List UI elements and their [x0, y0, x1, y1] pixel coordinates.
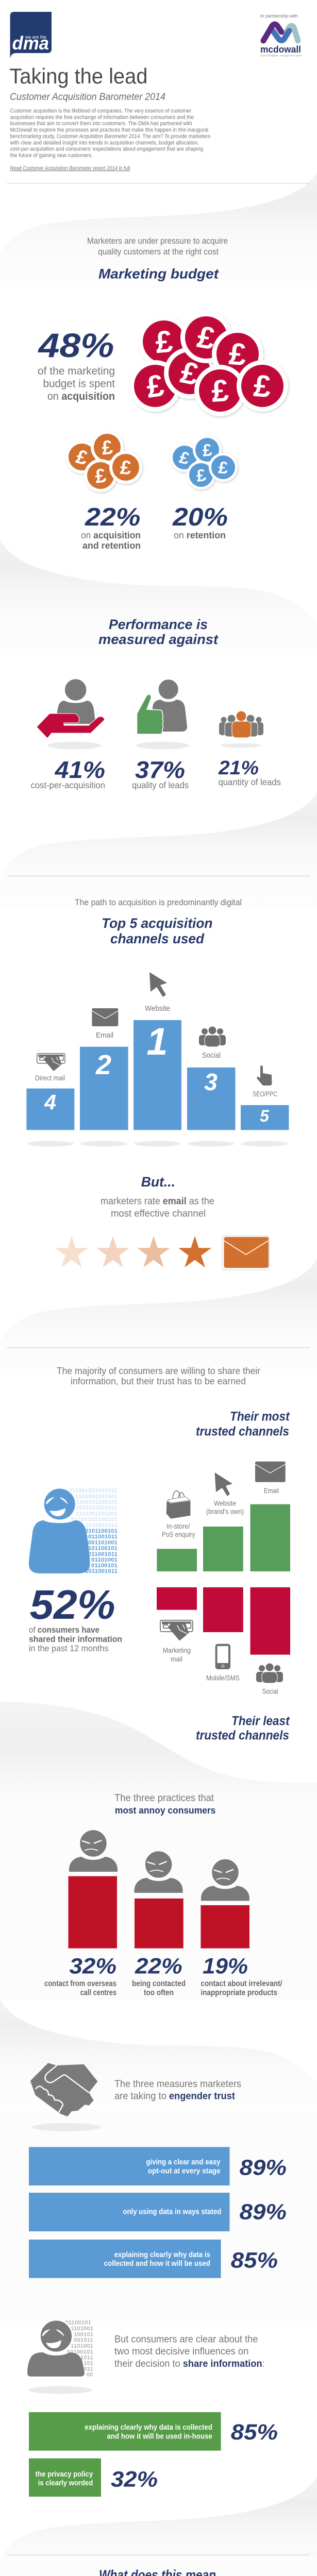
- bar: clear opt-out 89 percent: [29, 2147, 287, 2185]
- stat: 21 percent: 21%: [218, 757, 259, 779]
- stat: 20 percent: [172, 503, 228, 540]
- icon: orange pound coins: £: [74, 446, 90, 469]
- section intro: marketers under pressure: quality customers at the right cost: [98, 247, 219, 257]
- stat: 52 percent: in the past 12 months: [29, 1643, 109, 1653]
- binary data behind happy person: 1001011001011: [76, 1505, 118, 1511]
- heading: practices that annoy: [114, 1793, 215, 1816]
- icon: person thumbs up: [136, 679, 189, 749]
- label: website: Website: [214, 1500, 236, 1507]
- bar: explaining data 85 percent: [29, 2240, 278, 2278]
- stat: 48 percent: [37, 326, 115, 402]
- heading: most trusted channels: [196, 1410, 290, 1439]
- heading: most trusted channels: trusted channels: [196, 1425, 289, 1439]
- bar 3: 3: [204, 1069, 218, 1095]
- stat: 48 percent: budget is spent: [43, 378, 115, 390]
- heading: marketing budget: Marketing budget: [98, 266, 219, 282]
- stat: 20 percent: on retention: [174, 530, 226, 540]
- icon: group of people: [219, 711, 263, 748]
- bar: clear opt-out 89 percent: giving a clear and easy: [146, 2158, 221, 2166]
- heading: performance: measured against: [98, 632, 219, 647]
- label: email: Email: [264, 1487, 279, 1495]
- bar 2: [80, 1047, 128, 1130]
- icon: red pound coins: £: [144, 368, 166, 404]
- icon: red pound coins: £: [195, 319, 218, 356]
- bar: privacy policy 32 percent: is clearly worded: [38, 2479, 93, 2487]
- section intro: consumers willing to share: The majority of consumers are willing to share their: [57, 1366, 260, 1376]
- text block: email most effective: most effective channel: [111, 1209, 206, 1219]
- label: mobile sms: Mobile/SMS: [206, 1674, 240, 1682]
- label: in-store: [162, 1522, 195, 1538]
- icon: direct mail slot: [37, 1054, 65, 1071]
- binary data behind grey person: 01100101: [67, 2349, 93, 2355]
- text block: introduction: acquisition requires the free exchange of information between consumers and the: [10, 114, 194, 121]
- chart: annoyed consumers 19 percent: inappropriate products: [201, 1988, 277, 1997]
- bar: explaining data 85 percent: 85%: [231, 2248, 278, 2273]
- subtitle: Customer Acquisition Barometer 2014: [10, 92, 165, 103]
- label: website: [206, 1500, 244, 1516]
- text block: email most effective: marketers rate email as the: [101, 1196, 214, 1207]
- bar: privacy policy 32 percent: [29, 2459, 158, 2497]
- chart: annoyed consumers 19 percent: contact about irrelevant/: [201, 1979, 282, 1988]
- icon: red pound coins: £: [178, 354, 202, 392]
- heading: practices that annoy: most annoy consumers: [115, 1805, 215, 1816]
- bar: data in ways stated 89 percent: [29, 2193, 287, 2231]
- binary data behind happy person: 011001011: [88, 1534, 118, 1540]
- binary data behind happy person: 1100101100101: [76, 1499, 118, 1505]
- bar 4: 4: [44, 1090, 56, 1114]
- binary data behind grey person: 100101: [74, 2331, 93, 2337]
- binary data behind happy person: 01101001: [91, 1557, 118, 1563]
- text block: consumers decisive influences: [114, 2334, 265, 2369]
- bar: clear opt-out 89 percent: opt-out at every stage: [148, 2167, 221, 2175]
- bar 5: [241, 1105, 289, 1130]
- icon: orange pound coins: £: [120, 457, 132, 479]
- chart: annoyed consumers 19 percent: [201, 1859, 282, 1997]
- text block: consumers decisive influences: two most decisive influences on: [114, 2346, 248, 2357]
- icon: red pound coins: £: [211, 373, 229, 409]
- logo: mcdowall partner: mcdowall: [260, 44, 301, 55]
- text block: introduction: businesses that aim to convert them into customers. The DMA has partnered with: [10, 121, 192, 127]
- icon: envelope: [255, 1462, 286, 1482]
- icon: shopping bag: [166, 1491, 190, 1519]
- chart: annoyed consumers 32 percent: 32%: [69, 1954, 116, 1979]
- bar: explaining data in-house 85 percent: [29, 2412, 278, 2451]
- text block: introduction: benchmarking study, Customer Acquisition Barometer 2014. The aim? To provide marketers: [10, 133, 211, 140]
- icon: red pound coins: £: [227, 336, 248, 372]
- bar: data in ways stated 89 percent: only using data in ways stated: [123, 2208, 221, 2216]
- icon: cursor: [149, 972, 167, 997]
- bar 4: [26, 1089, 74, 1130]
- icon: blue pound coins: [170, 435, 238, 489]
- chart: annoyed consumers 22 percent: too often: [144, 1988, 174, 1997]
- label: website: (brand’s own): [206, 1508, 244, 1516]
- stat: 41 percent: 41%: [55, 756, 105, 783]
- stat: 48 percent: on acquisition: [47, 391, 115, 402]
- chart: most trusted channels: [157, 1462, 290, 1571]
- label: marketing mail: mail: [171, 1655, 182, 1663]
- icon: blue pound coins: £: [218, 457, 229, 478]
- text block: introduction: cost-per-acquisition and consumers’ expectations about engagement that are shaping: [10, 146, 203, 152]
- section intro: marketers under pressure: [87, 236, 228, 257]
- binary data behind grey person: 001011: [74, 2337, 93, 2344]
- label: in-store: In-store/: [166, 1522, 190, 1530]
- chart: annoyed consumers 22 percent: 22%: [135, 1954, 182, 1979]
- text block: introduction: McDowall to explore the processes and practices that make this happen in this inaugural: [10, 127, 208, 133]
- bar: explaining data in-house 85 percent: explaining clearly why data is collected: [85, 2424, 212, 2432]
- icon: mobile phone: [215, 1644, 230, 1669]
- label: direct mail: Direct mail: [35, 1074, 65, 1082]
- stat: 20 percent: 20%: [172, 503, 228, 531]
- section intro: consumers willing to share: [57, 1366, 260, 1386]
- bar: privacy policy 32 percent: the privacy policy: [36, 2470, 93, 2479]
- stat: 48 percent: 48%: [37, 326, 114, 364]
- text block: measures marketers are taking: are taking to engender trust: [114, 2091, 235, 2102]
- logo: dma: dma: [12, 32, 49, 54]
- bar 3: [187, 1067, 235, 1130]
- icon: red pound coins: [129, 312, 288, 416]
- binary data behind grey person: 1101001: [71, 2326, 93, 2332]
- heading: but: But...: [141, 1174, 175, 1190]
- heading: top 5 channels: Top 5 acquisition: [102, 916, 212, 931]
- binary data behind happy person: 011001011: [88, 1551, 118, 1557]
- stat: 22 percent: [81, 503, 141, 551]
- binary data behind happy person: 011001011001011: [69, 1488, 118, 1494]
- binary data behind happy person: 101100101: [88, 1546, 118, 1552]
- icon: orange pound coins: £: [101, 437, 113, 459]
- icon: envelope: [92, 1008, 118, 1026]
- icon: handshake: [30, 2063, 101, 2131]
- label: social: Social: [202, 1052, 221, 1060]
- text block: introduction: Customer acquisition is the lifeblood of companies. The very essence of customer: [10, 108, 191, 114]
- icon: red pound coins: £: [252, 368, 273, 404]
- heading: most trusted channels: Their most: [230, 1410, 290, 1424]
- heading: performance: [98, 617, 219, 647]
- binary data behind happy person: 1101001101001: [76, 1511, 118, 1517]
- text block: email most effective: [101, 1196, 214, 1219]
- stat: 21 percent: [218, 757, 281, 787]
- bar 5: 5: [260, 1107, 270, 1125]
- chart: annoyed consumers 32 percent: call centres: [80, 1988, 116, 1997]
- text block: consumers decisive influences: But consumers are clear about the: [114, 2334, 258, 2345]
- heading: least trusted channels: trusted channels: [196, 1728, 289, 1743]
- text block: measures marketers are taking: [114, 2078, 241, 2102]
- logo: mcdowall partner: In partnership with: [260, 13, 298, 19]
- star rating with envelope: [55, 1236, 269, 1270]
- stat: 22 percent: 22%: [85, 503, 140, 531]
- bar 1: 1: [146, 1020, 168, 1063]
- icon: pointing hand: [257, 1065, 272, 1086]
- stat: 41 percent: [31, 756, 105, 790]
- icon: orange pound coins: [65, 431, 142, 492]
- logo: dma: [10, 12, 52, 58]
- stat: 37 percent: [132, 756, 189, 790]
- label: website: Website: [145, 1005, 170, 1013]
- stat: 37 percent: quality of leads: [132, 780, 189, 790]
- stat: 37 percent: 37%: [135, 756, 185, 783]
- stat: 41 percent: cost-per-acquisition: [31, 780, 105, 790]
- icon: social people: [199, 1026, 226, 1047]
- heading: least trusted channels: [196, 1714, 290, 1743]
- section intro: marketers under pressure: Marketers are under pressure to acquire: [87, 236, 228, 246]
- title: Taking the lead: [9, 64, 147, 88]
- label: marketing mail: [163, 1647, 191, 1663]
- label: seo ppc: SEO/PPC: [253, 1090, 277, 1098]
- heading: practices that annoy: The three practices that: [114, 1793, 214, 1804]
- bar: data in ways stated 89 percent: 89%: [240, 2200, 287, 2225]
- chart: annoyed consumers 32 percent: [44, 1829, 118, 1997]
- binary data behind happy person: [69, 1488, 118, 1574]
- stat: 22 percent: on acquisition: [81, 530, 141, 540]
- stat: 52 percent: [29, 1582, 122, 1653]
- binary data behind grey person: 00: [87, 2372, 93, 2378]
- stat: 48 percent: of the marketing: [38, 365, 115, 377]
- icon: orange pound coins: £: [94, 465, 108, 488]
- binary data behind happy person: 1011001011: [85, 1568, 118, 1574]
- chart: least trusted channels: [157, 1587, 290, 1696]
- stat: 22 percent: and retention: [82, 540, 141, 551]
- binary data behind happy person: 1011001011: [85, 1522, 118, 1529]
- label: social: Social: [262, 1688, 278, 1696]
- bar 2: 2: [95, 1049, 111, 1080]
- icon: cursor: [214, 1472, 232, 1496]
- icon: happy grey person: [27, 2320, 92, 2394]
- chart: annoyed consumers 32 percent: contact from overseas: [44, 1979, 116, 1988]
- binary data behind grey person: 1011: [80, 2355, 93, 2361]
- stat: 52 percent: 52%: [30, 1582, 115, 1628]
- binary data behind grey person: 01100101: [65, 2320, 91, 2326]
- binary data behind happy person: 01100101: [91, 1563, 118, 1569]
- bar chart: top 5 channels: [26, 972, 289, 1147]
- icon: person with money hand: [37, 679, 105, 749]
- heading: top 5 channels: channels used: [110, 931, 204, 946]
- text block: introduction: the future of gaining new customers.: [10, 152, 93, 159]
- bar: explaining data in-house 85 percent: 85%: [231, 2420, 278, 2445]
- chart: annoyed consumers 22 percent: [132, 1851, 186, 1997]
- icon: social people: [256, 1663, 283, 1683]
- binary data behind grey person: 011: [84, 2366, 93, 2372]
- label: marketing mail: Marketing: [163, 1647, 191, 1654]
- logo: mcdowall partner: [260, 13, 301, 57]
- label: email: Email: [96, 1031, 113, 1040]
- heading: performance: Performance is: [109, 617, 208, 632]
- heading: top 5 channels: [102, 916, 212, 946]
- stat: 52 percent: shared their information: [29, 1634, 122, 1644]
- stat: 21 percent: quantity of leads: [219, 777, 281, 787]
- icon: blue pound coins: £: [202, 440, 213, 460]
- binary data behind happy person: 0101100101: [85, 1528, 118, 1534]
- icon: red pound coins: £: [154, 324, 174, 360]
- text block: introduction: [10, 108, 211, 159]
- logo: dma: we are the: [25, 35, 46, 40]
- bar: explaining data in-house 85 percent: and how it will be used in-house: [107, 2432, 212, 2441]
- icon: blue pound coins: £: [195, 465, 207, 485]
- label: in-store: PoS enquiry: [162, 1531, 195, 1538]
- chart: annoyed consumers 19 percent: 19%: [203, 1954, 248, 1979]
- binary data behind happy person: 1101001101001: [75, 1494, 118, 1500]
- bar: explaining data 85 percent: collected and how it will be used: [104, 2260, 210, 2268]
- heading: least trusted channels: Their least: [231, 1714, 290, 1728]
- text block: measures marketers are taking: The three measures marketers: [114, 2078, 241, 2090]
- logo: mcdowall partner: CUSTOMER ACQUISITION: [260, 55, 301, 57]
- icon: blue pound coins: £: [177, 447, 192, 468]
- bar: privacy policy 32 percent: 32%: [111, 2467, 158, 2492]
- stat: 52 percent: of consumers have: [29, 1625, 99, 1635]
- bar 1: [134, 1020, 181, 1130]
- section intro: consumers willing to share: information, but their trust has to be earned: [71, 1376, 246, 1386]
- icon: happy blue person: [29, 1488, 90, 1573]
- text block: consumers decisive influences: their decision to share information:: [114, 2358, 265, 2369]
- binary data behind happy person: 001101001: [88, 1539, 118, 1546]
- binary data behind happy person: 01100101100101: [71, 1517, 118, 1523]
- text block: introduction: with clear and detailed insight into trends in acquisition channels, budget allocation,: [10, 140, 199, 146]
- binary data behind grey person: [65, 2320, 93, 2378]
- bar: explaining data 85 percent: explaining clearly why data is: [114, 2251, 210, 2259]
- binary data behind grey person: 101: [84, 2360, 93, 2366]
- chart: annoyed consumers 22 percent: being contacted: [132, 1979, 186, 1988]
- section intro: path to acquisition: The path to acquisition is predominantly digital: [75, 898, 242, 907]
- binary data behind grey person: 1101001: [71, 2343, 93, 2349]
- link: read report: Read Customer Acquisition Barometer report 2014 in full: [10, 165, 130, 172]
- icon: marketing mail slot: [160, 1620, 193, 1641]
- bar: clear opt-out 89 percent: 89%: [240, 2156, 287, 2180]
